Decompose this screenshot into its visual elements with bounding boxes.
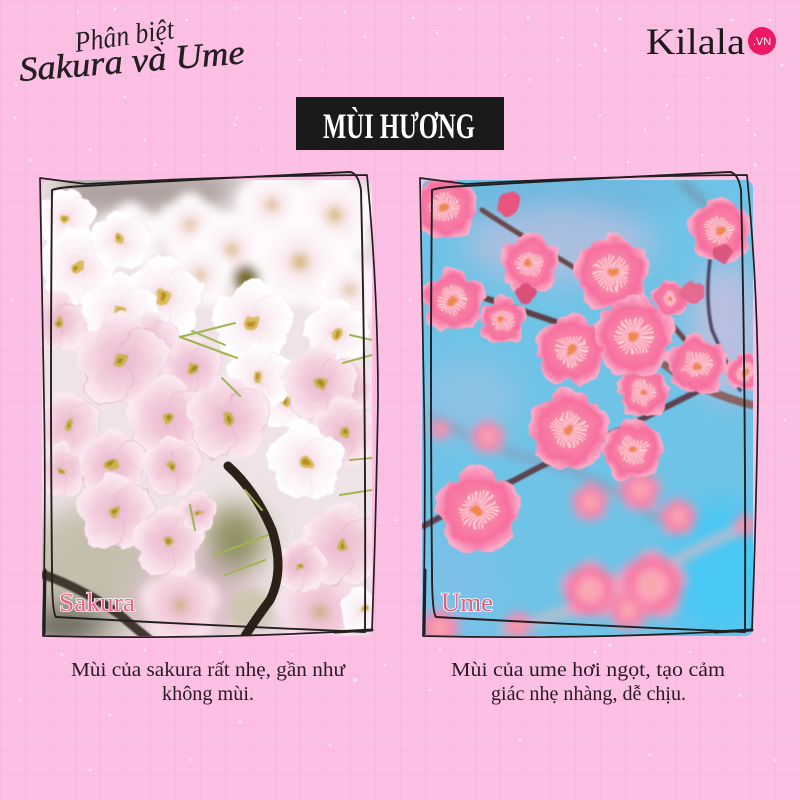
heading: Mùi hương: MÙI HƯƠNG	[323, 106, 475, 146]
frame: ume sketch outline	[420, 172, 758, 637]
text block: sakura scent	[71, 659, 346, 705]
title: Phân biệt Sakura và Ume	[18, 13, 246, 89]
text block: sakura scent: không mùi.	[162, 683, 254, 705]
text block: ume scent	[451, 659, 725, 705]
title: Phân biệt Sakura và Ume: Phân biệt	[72, 13, 177, 59]
text block: sakura scent: Mùi của sakura rất nhẹ, gần như	[71, 659, 346, 681]
heading: Mùi hương	[296, 97, 504, 150]
label: Sakura: Sakura	[59, 588, 135, 617]
panel: ume photo	[422, 180, 753, 636]
text block: ume scent: Mùi của ume hơi ngọt, tạo cảm	[451, 659, 725, 681]
blurred background blossoms	[98, 169, 382, 655]
branch and green sprigs	[180, 323, 372, 636]
title: Phân biệt Sakura và Ume: Sakura và Ume	[18, 34, 246, 89]
branches	[45, 575, 150, 640]
sharp ume blossoms	[412, 173, 764, 551]
sharp branches	[424, 210, 752, 526]
frame: sakura sketch outline	[40, 172, 378, 637]
logo: Kilala.VN	[646, 22, 776, 63]
panel: sakura photo	[42, 180, 372, 636]
text block: ume scent: giác nhẹ nhàng, dễ chịu.	[491, 683, 686, 705]
blurred background branches and blossoms	[421, 180, 756, 646]
sharp sakura blossoms	[28, 188, 384, 631]
label: Ume: Ume	[441, 588, 493, 617]
logo: Kilala.VN: Kilala	[646, 22, 745, 63]
logo: Kilala.VN: .VN	[753, 36, 771, 48]
